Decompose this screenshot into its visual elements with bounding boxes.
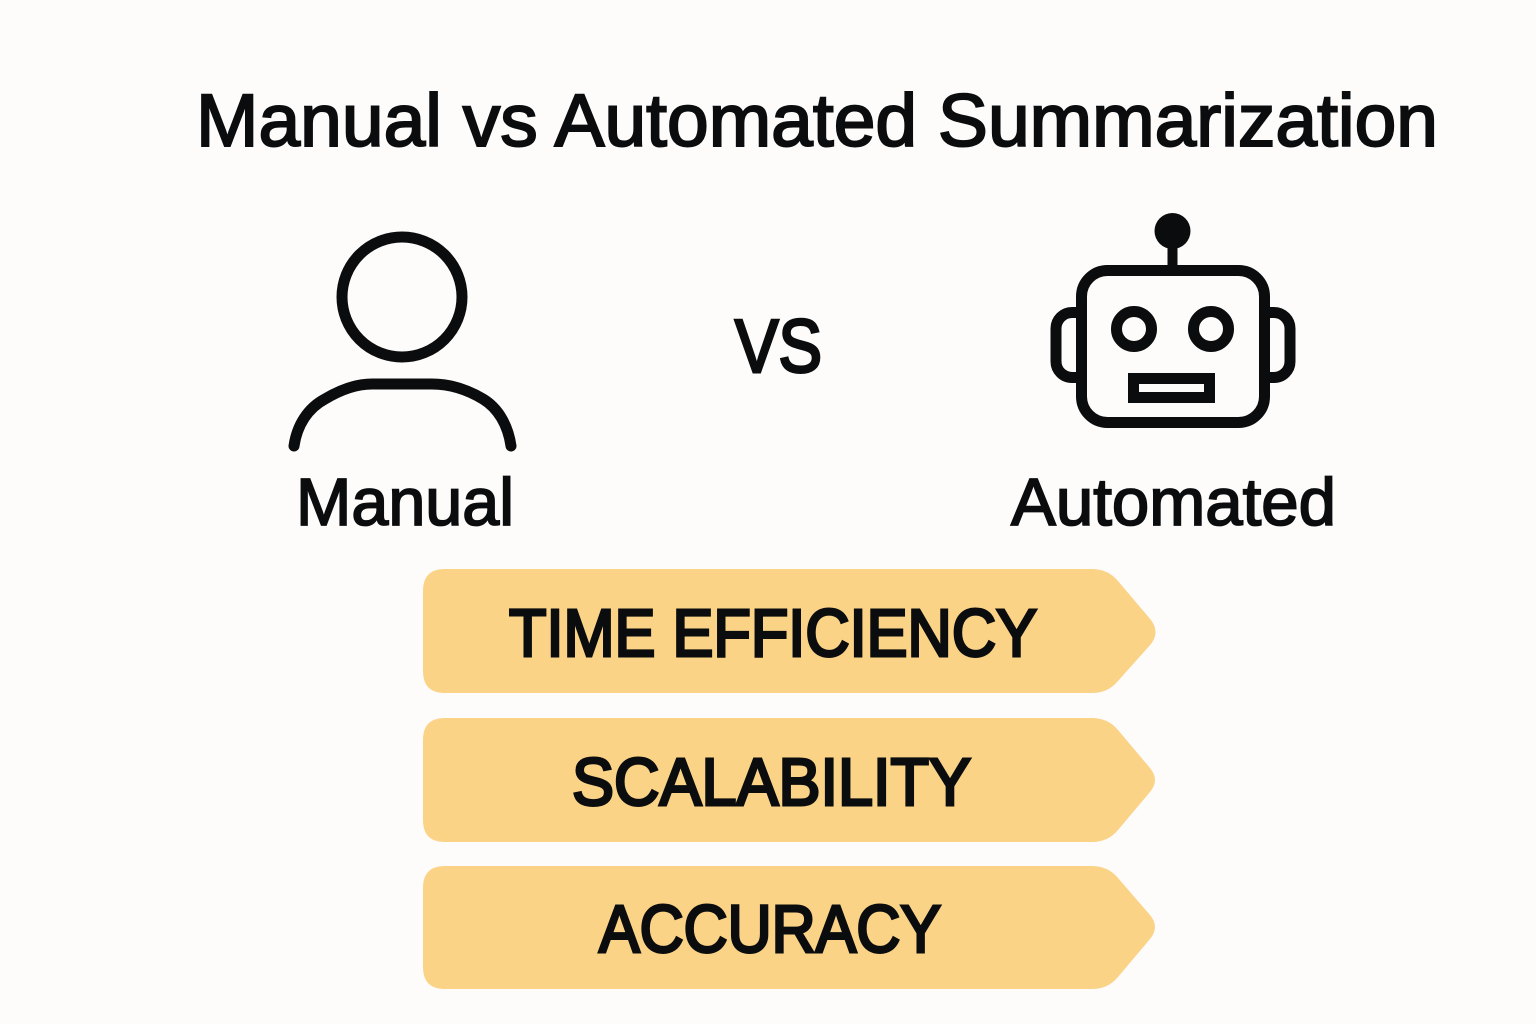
banner: time efficiency: TIME EFFICIENCY [509, 596, 1037, 671]
robot right ear [1269, 312, 1290, 378]
banner: scalability [423, 718, 1155, 842]
banner: accuracy [423, 866, 1155, 989]
label: Manual: Manual [296, 465, 514, 540]
vs label: VS [735, 304, 822, 388]
banner: scalability: SCALABILITY [572, 745, 971, 820]
icon: person (manual) [294, 237, 511, 446]
robot left ear [1056, 312, 1077, 378]
label: Automated: Automated [1011, 465, 1336, 540]
banner: time efficiency [423, 569, 1156, 693]
title: Manual vs Automated Summarization [196, 79, 1438, 162]
robot antenna [1154, 213, 1190, 269]
robot left eye [1116, 312, 1152, 346]
robot mouth [1134, 378, 1210, 398]
robot head [1082, 270, 1264, 422]
icon: robot (automated) [1056, 213, 1290, 422]
banner: accuracy: ACCURACY [599, 892, 941, 967]
robot right eye [1194, 312, 1228, 346]
